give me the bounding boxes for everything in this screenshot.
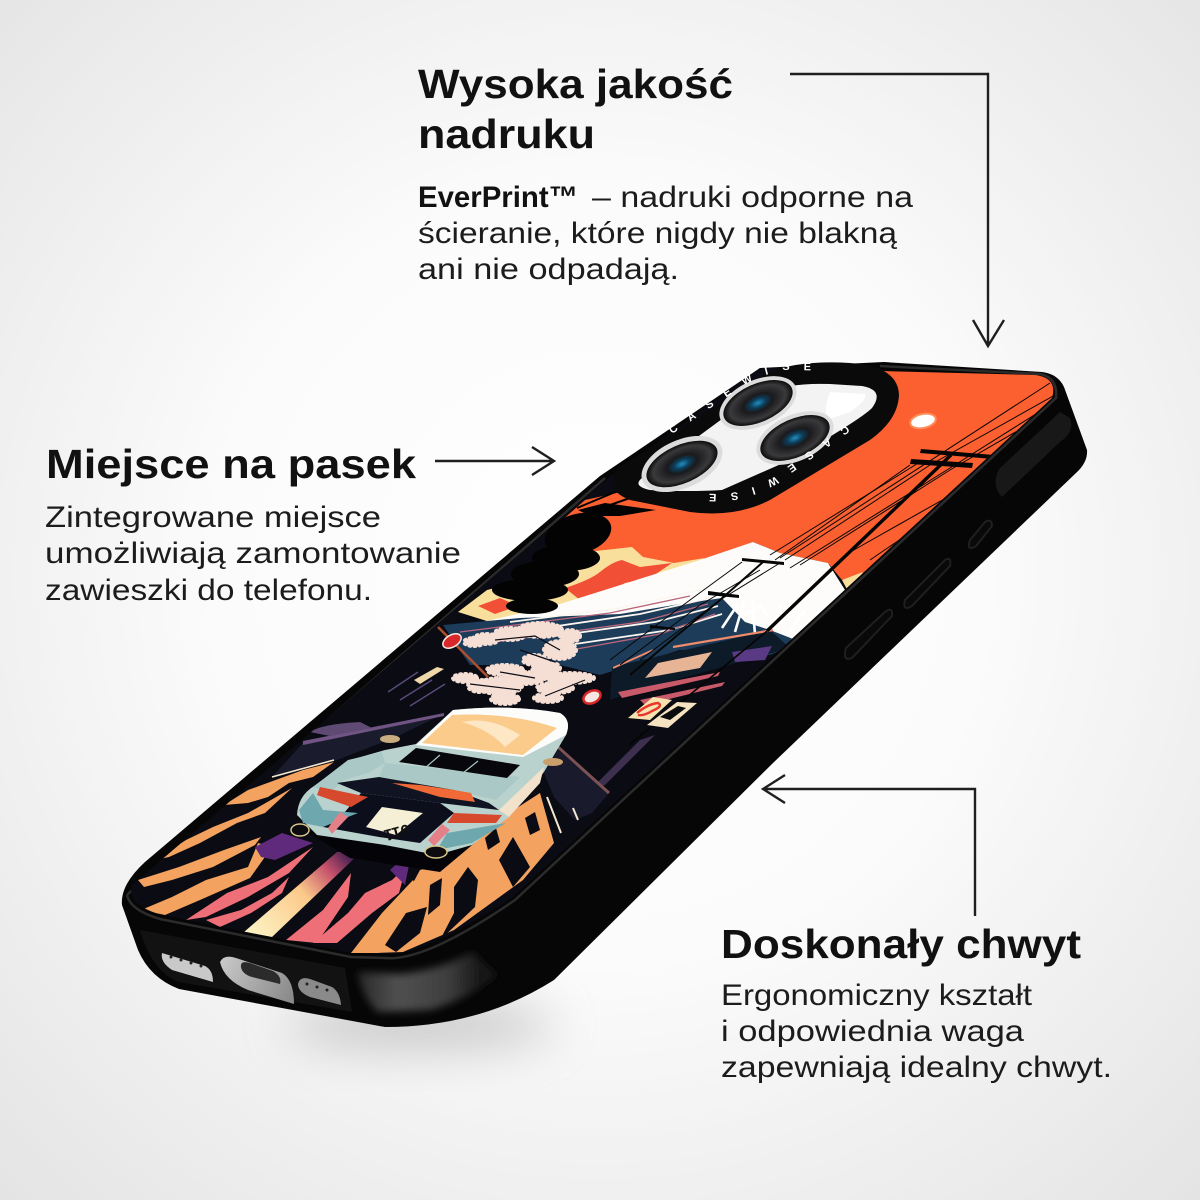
text: grip description: [721, 979, 1112, 1084]
blossom trees: [453, 623, 594, 704]
red sign post: [438, 627, 488, 677]
callout: print quality: [418, 61, 913, 286]
text: strap slot description: Zintegrowane miejsce: [45, 501, 381, 534]
text: print quality description: EverPrint™: [418, 181, 578, 214]
lens left: [633, 425, 731, 503]
road flames: [186, 847, 406, 943]
houses: [610, 630, 790, 700]
brand text on camera ring: [672, 370, 840, 434]
heading: strap slot: Miejsce na pasek: [46, 441, 416, 487]
mountain: [485, 542, 845, 640]
side buttons: [845, 521, 992, 659]
arrow: print quality: [790, 74, 1004, 346]
lens top: [711, 365, 805, 441]
trees: [492, 503, 656, 614]
printed artwork: [120, 360, 1080, 970]
car shadow: [302, 823, 477, 872]
arrow: strap slot: [435, 447, 554, 475]
text: print quality description: ścieranie, które nigdy nie blakną: [418, 217, 897, 250]
clouds: [458, 547, 705, 622]
porsche car: [291, 708, 568, 858]
text: print quality description: [418, 181, 913, 286]
text: grip description: zapewniają idealny chwyt.: [721, 1051, 1112, 1084]
text: print quality description: – nadruki odporne na: [592, 181, 913, 214]
rim of the case: [127, 366, 1056, 958]
street poles and wires: [610, 383, 1055, 745]
callout: strap slot: [45, 441, 461, 607]
sky: [560, 364, 1060, 590]
text: grip description: i odpowiednia waga: [721, 1015, 1024, 1048]
porsche car: 911: [382, 820, 411, 843]
flash: [909, 411, 937, 431]
heading: print quality: nadruku: [418, 111, 595, 157]
case body: [122, 362, 1087, 1027]
text: strap slot description: umożliwiają zamontowanie: [45, 537, 461, 570]
orange ground left: [138, 762, 334, 915]
heading: grip: Doskonały chwyt: [721, 921, 1081, 967]
camera island: CASEWISE: [670, 363, 811, 432]
text: strap slot description: [45, 501, 461, 607]
mountain snow ridges: [721, 609, 756, 632]
orange ground right: [351, 793, 554, 953]
center stripe: [244, 852, 361, 937]
text: print quality description: ani nie odpadają.: [418, 253, 679, 286]
glossy corner: [358, 952, 498, 1012]
camera island: CASEWISE: [710, 426, 849, 502]
bottom ports: [162, 953, 341, 1005]
side bump: [995, 412, 1071, 497]
lens right: [748, 400, 842, 476]
phone shadow: [285, 1003, 555, 1047]
road: [272, 717, 437, 777]
text: grip description: Ergonomiczny kształt: [721, 979, 1033, 1012]
heading: print quality: [418, 61, 733, 157]
left street details: [388, 672, 445, 706]
text: strap slot description: zawieszki do telefonu.: [45, 574, 372, 607]
street signs: [581, 688, 697, 728]
arrow: grip: [763, 775, 975, 916]
mountain foot: [443, 598, 801, 675]
callout: grip: [721, 921, 1112, 1084]
phone case illustration: [122, 362, 1088, 1027]
heading: print quality: Wysoka jakość: [418, 61, 733, 107]
camera island: [613, 362, 899, 514]
